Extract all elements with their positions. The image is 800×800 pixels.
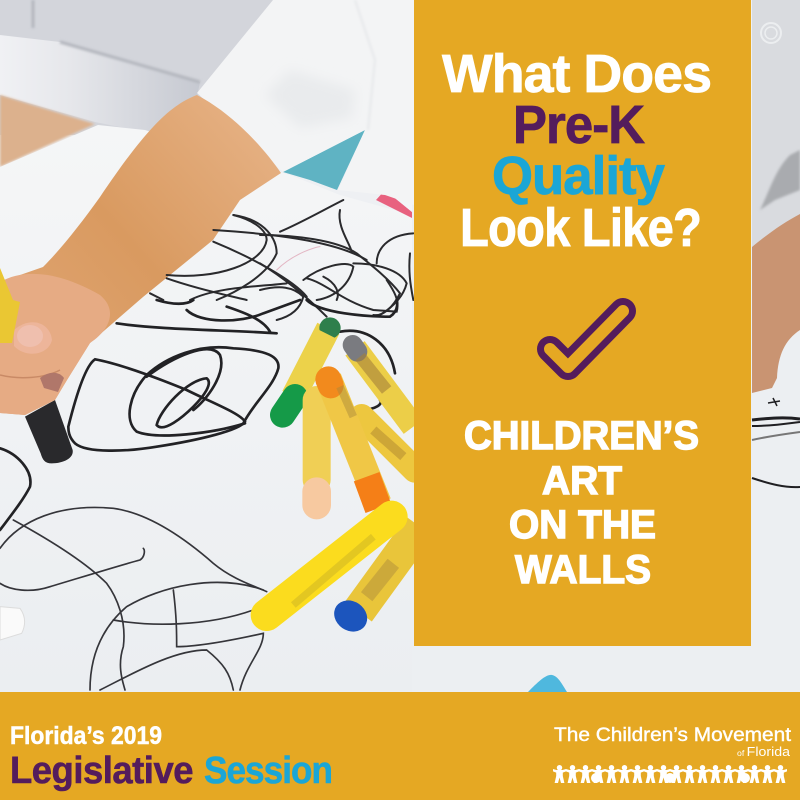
white crayon bbox=[0, 607, 25, 640]
footer band bbox=[0, 692, 800, 800]
blue object at table edge bbox=[528, 675, 567, 692]
peach crayon bbox=[275, 400, 359, 480]
text: Session: Session bbox=[204, 750, 332, 792]
held yellow crayon bbox=[0, 268, 20, 343]
icon: row of paper-chain children bbox=[553, 765, 787, 783]
sofa background bbox=[0, 0, 290, 135]
title line: Pre-K: Pre-K bbox=[513, 95, 645, 155]
subheading line: ART: ART bbox=[542, 459, 622, 503]
snap button on shirt bbox=[761, 23, 781, 43]
panel: gold headline panel bbox=[414, 0, 751, 646]
arm bbox=[0, 95, 281, 415]
orange crayon bbox=[328, 378, 378, 503]
subheading line: WALLS: WALLS bbox=[515, 548, 651, 592]
shirt sleeve bbox=[197, 0, 414, 205]
footer: session label bbox=[10, 722, 332, 792]
title line: Quality: Quality bbox=[492, 146, 665, 206]
logo name: The Children’s Movement bbox=[554, 725, 792, 746]
text: Florida's 2019: Florida’s 2019 bbox=[10, 722, 162, 750]
logo: The Children's Movement of Florida bbox=[553, 725, 792, 783]
logo subtitle: of Florida bbox=[737, 744, 791, 759]
scribbles lower bbox=[0, 300, 397, 690]
green-capped crayon bbox=[293, 328, 328, 397]
hand details bbox=[0, 274, 110, 415]
pink notebook bbox=[376, 190, 412, 218]
scribble tangle bbox=[260, 210, 413, 320]
black crayon bbox=[25, 400, 73, 463]
blue-capped crayon bbox=[358, 527, 420, 612]
title: What Does Pre-K Quality Look Like? bbox=[442, 44, 711, 258]
icon: check mark bbox=[550, 311, 623, 367]
crayons bbox=[0, 317, 420, 640]
right arm bbox=[752, 214, 800, 393]
text: Legislative: Legislative bbox=[10, 750, 193, 792]
shirt fold shadow bbox=[760, 150, 800, 210]
scribbles upper bbox=[150, 200, 367, 300]
teal object bbox=[283, 130, 365, 190]
gray-capped crayon bbox=[355, 348, 413, 427]
right side shirt bbox=[752, 0, 800, 250]
wood floor bbox=[0, 95, 95, 167]
table top bbox=[0, 125, 800, 692]
title line: What Does: What Does bbox=[442, 44, 711, 104]
barcode crayon bbox=[362, 417, 415, 470]
subheading line: ON THE: ON THE bbox=[509, 503, 656, 547]
title line: Look Like?: Look Like? bbox=[460, 198, 701, 258]
bright yellow crayon bbox=[267, 517, 392, 615]
subheading line: CHILDREN'S: CHILDREN’S bbox=[464, 414, 699, 458]
subheading: Children's art on the walls bbox=[464, 414, 699, 592]
right side scribbles bbox=[752, 398, 800, 487]
